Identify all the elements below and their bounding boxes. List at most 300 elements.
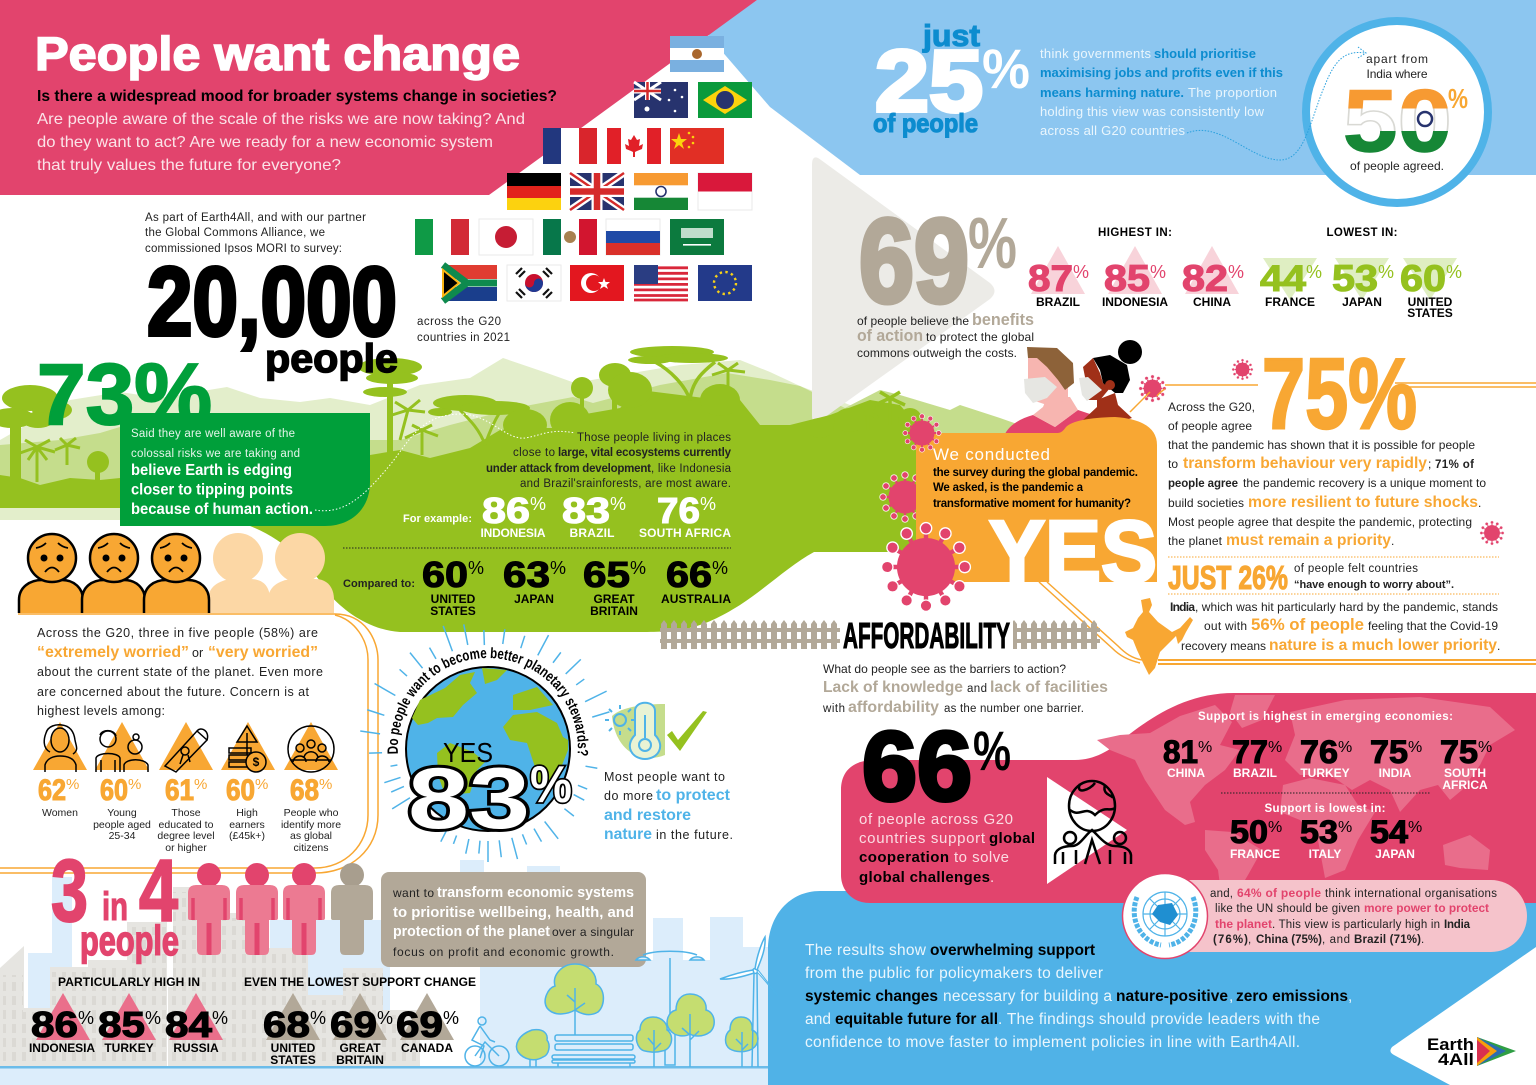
panel: taupe transform box: protection of the planet [393,924,550,940]
stats: lower awareness countries [343,554,731,618]
stats: high awareness countries: 76 [657,490,700,531]
logo: Earth4All [1427,1036,1516,1069]
stats: support highest: Support is highest in emerging economies: [1198,711,1453,723]
text: conclusion: systemic changes [805,988,938,1005]
text: across the G20: across the G20 [417,316,501,328]
chart: lowest in: UNITED [1408,295,1453,309]
text: global cooperation [859,811,1035,886]
text: India paragraph: nature is a much lower priority [1269,637,1497,654]
stats: lower awareness countries: BRITAIN [590,604,638,618]
flag: Turkey [570,265,624,301]
text: barriers: and [967,683,987,695]
text: pandemic paragraph: that the pandemic has shown that it is possible for people [1168,438,1475,452]
big number: 50 in flag colours: 50 [1343,71,1452,170]
big number: 20,000 people: 20,000 [147,247,397,356]
illustration: masked people [1005,340,1142,434]
text: ecosystems paragraph: under attack from development [486,463,651,475]
chart: lowest support countries: EVEN THE LOWEST SUPPORT CHANGE [244,975,476,989]
stats: support lowest: JAPAN [1375,847,1415,861]
stats: lower awareness countries: % [712,558,728,578]
icon: grey play triangle [812,157,994,423]
chart: lowest in: % [1446,262,1462,282]
text: India paragraph [1170,600,1500,654]
chart: lowest in: % [1306,262,1322,282]
text: barriers [822,662,1108,716]
big number: 20,000 people: people [265,337,398,381]
icon: small tree [636,1017,672,1067]
intro paragraph: Are people aware of the scale of the risks we are now taking? And [37,111,525,128]
stats: lower awareness countries: JAPAN [514,592,554,606]
text: just 25% of people: % [982,37,1030,100]
text: India paragraph: feeling that the Covid-19 [1368,619,1498,633]
chart: highest in: % [1073,262,1089,282]
callout: United Nations pill: . [1421,934,1424,946]
callout: United Nations pill: India [1444,919,1471,931]
group labels: educated to [159,819,214,831]
callout: United Nations pill: China (75%) [1256,934,1322,946]
text: pandemic paragraph: 71% of [1435,459,1474,471]
stats: support lowest: % [1408,819,1422,836]
flag: South Korea [507,265,561,301]
chart: concern by group: $ [253,755,260,769]
chart: lowest support countries: 69 [396,1004,443,1045]
stats: lower awareness countries: 60 [422,554,468,595]
stats: support highest: % [1268,739,1282,756]
stats: lower awareness countries: % [468,558,484,578]
chart: highest in: INDONESIA [1102,295,1168,309]
stats: support highest: 76 [1300,734,1338,770]
stats: high awareness countries: 83 [562,490,610,531]
text: global cooperation: global challenges [859,869,990,886]
intro paragraph: do they want to act? Are we ready for a new economic system [37,134,493,151]
figure [188,863,230,955]
chart: lowest in: JAPAN [1342,295,1382,309]
stats: high awareness countries: % [530,494,546,514]
chart: highest in: HIGHEST IN: [1098,227,1172,239]
orange lines [1039,383,1536,664]
fence right [1013,620,1100,649]
text: across the G20 [417,316,510,344]
text: 3 in 4 people [51,841,179,964]
stats: high awareness countries: % [700,494,716,514]
icon: small virus right [1480,521,1504,545]
text: worry paragraph: “very worried” [208,644,318,661]
text: pandemic paragraph: transform behaviour very rapidly [1183,455,1427,472]
stats: support lowest: 54 [1370,814,1408,850]
chart: particularly high countries: INDONESIA [29,1041,95,1055]
callout: India circle: apart from [1366,52,1428,66]
intro paragraph [37,111,525,174]
chart: highest in: % [1150,262,1166,282]
callout: United Nations pill [1122,874,1527,958]
callout: United Nations pill: , [1248,934,1251,946]
percent values: % [128,776,141,793]
text: protect and restore: in the future. [656,828,733,842]
flag: Brazil [698,82,752,118]
percent values: 62 [38,774,66,807]
text: survey introduction: commissioned Ipsos MORI to survey: [145,243,342,255]
icon: four person figures [188,863,373,955]
chart: lowest in [1260,227,1462,320]
text: barriers: lack of facilities [990,679,1108,696]
text: pandemic paragraph: ; [1428,457,1431,471]
text: 3 in 4 people: 3 [51,841,88,940]
flag: Indonesia [698,173,752,210]
text: global cooperation: . [990,869,994,886]
chart: lowest support countries: BRITAIN [336,1053,384,1067]
chart: lowest support countries: % [310,1008,326,1028]
text: ecosystems paragraph: and Brazil'srainforests, are most aware. [520,478,731,490]
text: worry paragraph: are concerned about the future. Concern is at [37,685,310,699]
text: protect and restore: nature [604,826,652,843]
chart: particularly high countries: 85 [98,1004,145,1045]
stats: support highest: 81 [1163,734,1198,770]
sun rays [360,624,609,862]
callout: India circle: India where [1366,67,1428,81]
icon: medium tree [667,994,714,1067]
stats: lower awareness countries: % [630,558,646,578]
group labels: Women [42,807,78,819]
flag: Germany [507,173,561,210]
text: protect and restore: and restore [604,807,691,824]
text: prioritise jobs paragraph: holding this view was consistently low [1040,104,1265,119]
text: barriers: What do people see as the barriers to action? [823,662,1066,676]
stats: support highest: AFRICA [1442,778,1488,792]
flags [415,36,752,301]
text: benefits of action: of action [857,327,923,345]
group labels: or higher [165,842,207,854]
panel: green awareness box: believe Earth is edging [131,462,292,479]
icon: tree right [726,1017,758,1067]
text: 75%: 75% [1262,338,1417,450]
group labels: People who [284,807,339,819]
callout: United Nations pill: , and [1322,934,1350,946]
text: barriers: as the number one barrier. [944,703,1084,715]
icon: UN emblem [1122,874,1208,958]
text: protect and restore: do more [604,789,653,803]
text: pandemic paragraph: people agree [1168,478,1238,490]
group labels: High [236,807,258,819]
text: worry paragraph: Across the G20, three in five people (58%) are [37,626,318,640]
text: pandemic paragraph: . [1391,534,1394,548]
chart: particularly high countries: PARTICULARLY HIGH IN [58,975,200,989]
chart: particularly high countries: 86 [31,1004,78,1045]
panel: green awareness box: Said they are well aware of the [131,428,295,440]
group labels: degree level [157,830,215,842]
text: prioritise jobs paragraph [1040,46,1283,138]
text: worry paragraph: “extremely worried” [37,644,189,661]
icon: map of India [1125,598,1193,675]
stats: support lowest: ITALY [1309,847,1341,861]
illustration: forest trees [0,346,922,482]
icon: wind turbine [720,937,765,1067]
man [1005,347,1100,434]
chart: lowest in: LOWEST IN: [1326,227,1398,239]
chart: lowest in: 44 [1260,258,1306,299]
group labels: Young [107,807,137,819]
icon: bench [552,1035,635,1067]
panel: taupe transform box: focus on profit and economic growth. [393,945,614,959]
flag: Australia [634,82,688,118]
stats: support highest: INDIA [1379,766,1412,780]
text: survey introduction: the Global Commons Alliance, we [145,227,325,239]
text: pandemic paragraph: to [1168,457,1178,471]
flag: Mexico [543,219,597,255]
text: 3 in 4 people: in [102,885,128,929]
heading: affordability: AFFORDABILITY [843,615,1010,656]
flag: South Africa [443,265,497,301]
stats: support lowest: Support is lowest in: [1264,803,1386,815]
flag: India [634,173,688,210]
text: ecosystems paragraph: Those people living in places [577,432,731,444]
chart: hills and forest background [0,358,1020,520]
text: survey introduction: As part of Earth4All, and with our partner [145,212,366,224]
text: pandemic paragraph: of people agree [1168,419,1252,433]
text: pandemic paragraph: . [1478,496,1481,510]
text: 3 in 4 people: 4 [139,841,178,940]
big number 83 percent: 83 [408,751,530,847]
panel: green awareness box: colossal risks we are taking and [131,448,300,460]
stats: lower awareness countries: 65 [583,554,630,595]
group labels: identify more [281,819,341,831]
icon: climate thermometer and check [605,703,707,759]
text: prioritise jobs paragraph: maximising jobs and profits even if this [1040,65,1283,80]
callout: India circle [1306,21,1488,203]
text: conclusion: . The findings should provide leaders with the [998,1011,1320,1028]
icon: large virus [882,523,970,611]
illustration: park scene [465,937,765,1067]
flag: United Kingdom [570,173,624,210]
text: worry paragraph: or [192,646,203,660]
panel: blue header [707,0,1536,175]
globe [406,667,570,831]
dotted connector [315,414,575,511]
chart: lowest in: FRANCE [1265,295,1315,309]
icon: cooperation triangle and people [1047,777,1131,884]
stats: high awareness countries: % [610,494,626,514]
text: conclusion: confidence to move faster to implement policies in line with Earth4All. [805,1034,1300,1051]
chart: lowest support countries: 68 [263,1004,310,1045]
percent values: % [66,776,79,793]
text: conclusion: , [1229,988,1233,1005]
flag: Saudi Arabia [670,219,724,255]
chart: particularly high countries: RUSSIA [173,1041,219,1055]
subtitle question: Is there a widespread mood for broader systems change in societies? [37,88,557,105]
percent values: 60 [100,774,128,807]
percent values: 68 [290,774,319,807]
flag: China [670,128,724,164]
big word: YES: YES [989,502,1157,601]
text: protect and restore: Most people want to [604,770,725,784]
callout: United Nations pill: and, [1210,888,1233,900]
text: global cooperation: global [989,830,1035,847]
text: worry paragraph [37,626,323,718]
arrow: dotted connector to circle [1187,47,1366,160]
panel: taupe transform box: to prioritise wellbeing, health, and [393,905,634,921]
chart: highest in: 82 [1182,258,1228,299]
text: India paragraph: , which was hit particularly hard by the pandemic, stands [1195,600,1498,614]
text: India paragraph: . [1497,639,1500,653]
panel: taupe transform box [381,872,646,967]
text: just 25% of people [873,18,1030,138]
callout: United Nations pill: Brazil (71%) [1354,934,1421,946]
text: just 26% [1168,559,1454,596]
stats: high awareness countries: INDONESIA [480,526,546,540]
chart: lowest support countries: STATES [270,1053,316,1067]
chart: highest in: CHINA [1193,295,1231,309]
panel: orange pandemic question: We conducted [933,445,1050,464]
chart: particularly high countries: % [145,1008,161,1028]
text: benefits of action [857,311,1034,360]
panel: green awareness box: closer to tipping points [131,482,293,498]
text: prioritise jobs paragraph: across all G20 countries [1040,123,1186,138]
chart: lowest in: 60 [1400,258,1446,299]
stats: support lowest [1230,803,1422,861]
stats: support lowest: % [1338,819,1352,836]
text: survey introduction [145,212,366,255]
stats: high awareness countries: 86 [482,490,530,531]
curved question [398,658,578,760]
text: global cooperation: to solve [954,849,1009,866]
fence left [660,620,840,649]
group labels: people aged [93,819,151,831]
callout: United Nations pill: think international organisations [1325,888,1497,900]
text: pandemic paragraph: more resilient to future shocks [1248,494,1478,511]
label yes: YES [443,737,493,768]
icon: globe with people [288,726,334,772]
text: conclusion: and [805,1011,831,1028]
big number: 66%: 66 [862,711,972,821]
panel: orange pandemic question: transformative moment for humanity? [933,498,1131,510]
big number: 66%: % [973,719,1011,782]
text: prioritise jobs paragraph: think governments [1040,46,1152,61]
stats: support highest: SOUTH [1444,766,1486,780]
text: protect and restore [604,770,733,843]
big number: 69%: 69 [859,195,969,328]
icon: street lamp [636,951,704,1065]
percent values: % [255,776,268,793]
stats: support highest: TURKEY [1300,766,1350,780]
text: global cooperation: of people across G20 [859,811,1013,828]
title: People want change [35,27,520,80]
intro paragraph: that truly values the future for everyone? [37,157,341,174]
stats: support highest: % [1198,739,1212,756]
panel: taupe transform box: transform economic systems [437,885,634,901]
text: conclusion: The results show [805,942,927,959]
text: just 25% of people: 25 [875,33,983,130]
text: ecosystems paragraph: close to [513,447,555,459]
panel: bottom blue conclusion [768,891,1536,1085]
stats: lower awareness countries: 63 [503,554,550,595]
text: just 25% of people: just [922,18,980,53]
icon: coins and arrow [229,726,266,772]
text: across the G20: countries in 2021 [417,332,510,344]
chart: highest in [1028,227,1244,309]
text: pandemic paragraph: Across the G20, [1168,400,1255,414]
group labels: as global [290,830,332,842]
stats: high awareness countries [403,490,731,540]
text: barriers: Lack of knowledge [823,679,963,696]
chart: globe 83 percent [360,624,610,862]
icon: cyclist [465,1017,509,1066]
icon: woman [44,725,77,772]
stats: high awareness countries: For example: [403,513,472,525]
chart: lowest support countries: % [377,1008,393,1028]
text: conclusion: , [1348,988,1352,1005]
text: pandemic paragraph [1168,400,1486,549]
stats: support highest: % [1478,739,1492,756]
chart: concern by group [33,722,341,854]
panel: green awareness box: because of human action. [131,501,313,518]
flag: Italy [415,219,469,255]
chart: lowest support countries: 69 [330,1004,377,1045]
stats: lower awareness countries: % [550,558,566,578]
flag: Japan [479,219,533,255]
illustration: city skyline [0,860,770,1085]
panel: taupe transform box: over a singular [552,925,634,939]
text: global cooperation: countries support [859,830,986,847]
text: ecosystems paragraph [486,432,732,490]
icon: turbine blade tip [757,970,778,996]
chart: globe 83 percent: % [530,756,572,814]
callout: United Nations pill: like the UN should be given [1215,903,1360,915]
chart: lowest support countries [244,975,476,1067]
flag: United States [634,265,688,301]
chart: particularly high countries: 84 [165,1004,212,1045]
chart: lowest in: STATES [1407,306,1453,320]
text: benefits of action: to protect the global [926,330,1034,344]
stats: lower awareness countries: GREAT [593,592,635,606]
chart: globe 83 percent: Do people want to become better planetary stewards? [388,647,588,756]
text: conclusion [805,942,1352,1051]
group labels [42,807,341,854]
text: worry paragraph: about the current state of the planet. Even more [37,665,323,679]
group labels: citizens [293,842,329,854]
big number: 69%: % [968,204,1017,284]
text: benefits of action: commons outweigh the costs. [857,346,1017,360]
text: India paragraph: out with [1204,619,1247,633]
chart: particularly high countries [29,975,228,1055]
callout: United Nations pill: (76%) [1213,934,1248,946]
flag: European Union [698,265,752,301]
group labels: 25-34 [109,830,136,842]
icon: virus behind panel [880,472,930,522]
panel: green awareness box [120,413,370,526]
panel: taupe transform box: want to [392,886,434,900]
percent values: % [319,776,332,793]
stats: lower awareness countries: Compared to: [343,578,415,590]
text: pandemic paragraph: the pandemic recovery is a unique moment to [1243,476,1486,490]
text: pandemic paragraph: build societies [1168,496,1244,510]
panel: orange pandemic question [916,417,1157,601]
flag: France [543,128,597,164]
stats: lower awareness countries: AUSTRALIA [661,592,731,606]
stats: support highest: 75 [1370,734,1408,770]
icon: worried people row [19,533,334,613]
stats: support highest: 75 [1440,734,1478,770]
percent values: % [194,776,207,793]
stats: lower awareness countries: 66 [666,554,712,595]
icon: virus near panel [1139,375,1166,402]
text: conclusion: overwhelming support [930,942,1095,959]
group labels: Those [171,807,201,819]
callout: United Nations pill: 64% of people [1237,886,1321,900]
stats: support highest: 77 [1232,734,1268,770]
percent values: 61 [165,774,194,807]
text: benefits of action: of people believe the [857,314,969,328]
stats: support lowest: 53 [1300,814,1338,850]
chart: highest in: % [1228,262,1244,282]
